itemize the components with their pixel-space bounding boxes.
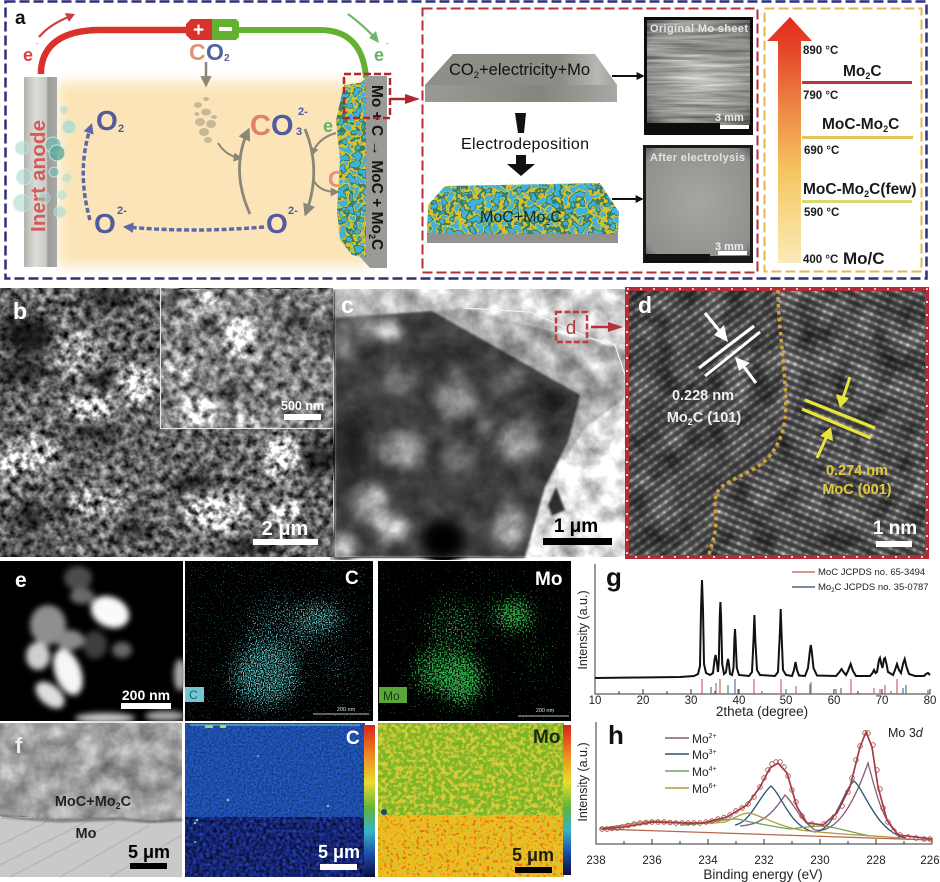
legend g xyxy=(792,567,929,594)
panel: Mo elemental map xyxy=(378,561,571,721)
Mo plate: CO xyxy=(449,61,474,79)
panel d: HRTEM image xyxy=(627,289,927,557)
x tick labels h: 226 xyxy=(920,855,940,867)
phase labels: 790 °C xyxy=(803,90,838,102)
scale bar 1 um: 1 μm xyxy=(554,516,598,537)
phase labels: Mo/C xyxy=(843,249,885,268)
carbon flakes xyxy=(194,97,217,143)
phase labels: 2 xyxy=(865,71,870,81)
Mo2C annotation xyxy=(667,388,741,427)
Mo title: Mo xyxy=(535,569,562,590)
phase labels xyxy=(802,45,916,268)
CO3 2- label: O xyxy=(271,110,294,142)
C title: C xyxy=(345,568,359,589)
bold down arrow xyxy=(507,155,535,176)
region d marker and arrow: d xyxy=(566,318,576,339)
Mo plate: 2 xyxy=(474,70,479,81)
Mo plate: +electricity+Mo xyxy=(479,61,590,79)
scale bar 5 um: 5 μm xyxy=(128,842,170,862)
colour scale Mo xyxy=(563,725,571,875)
region d marker and arrow xyxy=(556,312,623,342)
photo: after electrolysis: 3 mm xyxy=(715,241,744,253)
scale bar 1 um xyxy=(543,516,612,545)
Mo scale bar xyxy=(518,708,569,716)
electron flow arrows: e xyxy=(374,45,384,65)
phase labels: 690 °C xyxy=(804,145,839,157)
phase labels: 890 °C xyxy=(803,45,838,57)
x tick labels g: 80 xyxy=(924,695,936,707)
deposited plate: C xyxy=(550,209,562,226)
O2 label: O xyxy=(96,105,118,136)
phase labels: C(few) xyxy=(869,181,916,198)
C legend chip: C xyxy=(189,688,198,702)
Mo2C annotation: Mo xyxy=(667,410,688,426)
coating label: MoC+Mo xyxy=(55,794,116,810)
panel: C intensity map xyxy=(185,723,375,877)
CO3 2- label: 3 xyxy=(296,126,302,138)
phase labels: C xyxy=(870,63,882,80)
panel: C elemental map xyxy=(185,561,373,721)
C title: C xyxy=(346,728,360,749)
Mo label: Mo xyxy=(76,826,97,842)
scale bar 1 nm: 1 nm xyxy=(873,518,917,539)
Mo 3d label: Mo 3d xyxy=(888,726,924,740)
photo: after electrolysis xyxy=(643,145,753,263)
MoC annotation: MoC (001) xyxy=(822,482,892,498)
photo: original Mo sheet xyxy=(644,17,753,135)
panel c: TEM image xyxy=(330,289,625,560)
envelope fit xyxy=(602,732,932,839)
Mo scale bar: 200 nm xyxy=(536,708,555,714)
Mo plate xyxy=(425,54,617,102)
temperature arrow xyxy=(767,17,812,263)
e- and C at cathode: C xyxy=(328,166,345,192)
colour scale C xyxy=(364,725,375,877)
label g: g xyxy=(606,562,622,592)
oxygen ion dashed cycle xyxy=(83,126,264,230)
legend h: 4+ xyxy=(709,766,717,773)
scale bar 200 nm: 200 nm xyxy=(122,687,170,703)
label d: d xyxy=(638,292,652,318)
x tick labels g: 60 xyxy=(828,695,840,707)
electrodeposition label: Electrodeposition xyxy=(461,136,589,153)
Mo2C annotation: 2 xyxy=(688,417,693,427)
x tick labels h: 236 xyxy=(642,855,662,867)
x tick labels h xyxy=(586,855,940,867)
legend h: Mo xyxy=(692,782,709,796)
electron flow arrows xyxy=(23,13,389,65)
CO3 2- label: C xyxy=(250,110,271,142)
h axes xyxy=(596,722,932,844)
CO2 label with arrow xyxy=(189,39,230,84)
phase labels: 400 °C xyxy=(803,254,838,266)
legend h: Mo xyxy=(692,732,709,746)
down arrow stem xyxy=(515,113,526,133)
legend g: Mo xyxy=(818,582,831,593)
legend h: 6+ xyxy=(709,783,717,790)
XRD trace xyxy=(595,580,930,678)
deposit MoC and Mo2C layer xyxy=(336,82,366,258)
coating label: 2 xyxy=(116,801,121,811)
phase labels: MoC-Mo xyxy=(822,116,883,133)
x tick labels h: 234 xyxy=(698,855,718,867)
gas bubbles xyxy=(13,106,76,218)
x tick labels g: 40 xyxy=(733,695,745,707)
C legend chip xyxy=(185,687,204,702)
electron flow arrows: - xyxy=(36,41,39,48)
panel h: XPS chart xyxy=(576,720,940,882)
inset SEM xyxy=(160,288,334,428)
coating label: C xyxy=(121,794,132,810)
C scale bar: 200 nm xyxy=(337,707,356,713)
inert anode electrode: Inert anode xyxy=(27,120,50,232)
x title h: Binding energy (eV) xyxy=(703,867,823,882)
Mo cathode sheet: Mo + C → MoC + Mo xyxy=(368,85,385,234)
O2- label right xyxy=(266,205,298,239)
lattice fringes Mo2C xyxy=(699,313,760,383)
wires and battery xyxy=(41,19,366,78)
panel label a: a xyxy=(15,8,26,29)
photo: original Mo sheet: Original Mo sheet xyxy=(650,23,748,35)
fit components xyxy=(600,763,932,840)
zoom box and arrow xyxy=(344,74,420,118)
arrow to after photo xyxy=(612,198,642,200)
C scale bar xyxy=(313,707,369,714)
deposited plate: MoC+Mo xyxy=(480,209,545,226)
legend g: 2 xyxy=(831,588,835,594)
phase labels: 2 xyxy=(883,124,888,134)
Mo cathode sheet: C xyxy=(368,239,385,250)
label h: h xyxy=(608,720,624,750)
panel g: XRD chart xyxy=(576,562,936,719)
panel: temperature phase ladder xyxy=(764,8,922,272)
CO2 label with arrow: C xyxy=(189,39,206,65)
electron flow arrows: - xyxy=(386,41,389,48)
CO2 label with arrow: O xyxy=(206,39,224,65)
O2- label right: O xyxy=(266,208,288,239)
x tick labels g: 70 xyxy=(876,695,888,707)
Mo2C annotation: 0.228 nm xyxy=(672,388,734,404)
photo: original Mo sheet: 3 mm xyxy=(715,112,744,124)
wires and battery: + xyxy=(193,20,204,41)
O2- label left: 2- xyxy=(117,205,127,217)
O2- label right: 2- xyxy=(288,205,298,217)
CO3 2- label: 2- xyxy=(298,106,308,118)
phase labels: MoC-Mo xyxy=(803,181,864,198)
x tick labels g: 50 xyxy=(780,695,792,707)
x tick labels g xyxy=(589,695,936,707)
Mo title: Mo xyxy=(533,727,560,748)
Mo2C annotation: C (101) xyxy=(693,410,741,426)
phase labels: 2 xyxy=(864,189,869,199)
panel e: dark field image xyxy=(0,561,186,723)
MoC annotation xyxy=(822,463,892,498)
scale bar 5 um: 5 μm xyxy=(512,845,554,865)
x tick labels h: 232 xyxy=(754,855,774,867)
electron flow arrows: e xyxy=(23,45,33,65)
panel b: SEM image xyxy=(0,288,335,557)
legend g: MoC JCPDS no. 65-3494 xyxy=(818,567,925,578)
inert anode electrode xyxy=(24,77,57,267)
CO3 2- label xyxy=(250,106,308,142)
label b: b xyxy=(13,298,27,324)
x title g: 2theta (degree) xyxy=(716,704,808,719)
deposited plate xyxy=(427,183,619,243)
carbonate cycle arrows xyxy=(218,129,337,214)
legend h: 3+ xyxy=(709,749,717,756)
phase labels: Mo xyxy=(843,63,865,80)
O2- label left xyxy=(94,205,127,239)
molten salt bath xyxy=(58,82,370,266)
legend h: 2+ xyxy=(709,733,717,740)
arrow to original sheet photo xyxy=(612,75,643,77)
reference lines xyxy=(702,679,928,694)
Mo legend chip xyxy=(379,687,407,703)
g axes xyxy=(595,564,930,694)
scale bar 2 um xyxy=(253,518,318,545)
scale bar 5 um: 5 μm xyxy=(318,842,360,862)
data circles xyxy=(600,731,932,841)
x tick labels h: 230 xyxy=(810,855,830,867)
O2 label: 2 xyxy=(118,123,124,135)
legend h: Mo xyxy=(692,748,709,762)
MoC annotation: 0.274 nm xyxy=(826,463,888,479)
e- and C at cathode: e xyxy=(323,116,333,136)
x tick labels g: 20 xyxy=(637,695,649,707)
Mo cathode sheet: 2 xyxy=(367,234,377,239)
scale bar 2 um: 2 μm xyxy=(262,518,308,540)
CO2 label with arrow: 2 xyxy=(224,53,230,64)
panel a: electrolysis schematic xyxy=(6,2,926,278)
x tick labels h: 228 xyxy=(866,855,886,867)
inset SEM: 500 nm xyxy=(281,399,324,413)
y label g: Intensity (a.u.) xyxy=(576,590,590,670)
legend g: C JCPDS no. 35-0787 xyxy=(835,582,929,593)
lattice fringes MoC xyxy=(802,377,875,458)
photo: after electrolysis: After electrolysis xyxy=(650,152,745,164)
legend h xyxy=(665,732,717,796)
x tick labels g: 10 xyxy=(589,695,601,707)
phase boundary dotted line xyxy=(709,290,786,555)
label c: c xyxy=(341,292,354,318)
y label h: Intensity (a.u.) xyxy=(576,742,590,822)
label e: e xyxy=(15,569,27,592)
Mo legend chip: Mo xyxy=(383,689,400,703)
x tick labels g: 30 xyxy=(685,695,697,707)
panel: electrodeposition process xyxy=(422,8,758,272)
e- and C at cathode xyxy=(323,116,345,192)
O2- label left: O xyxy=(94,208,116,239)
phase labels: 590 °C xyxy=(804,207,839,219)
legend h: Mo xyxy=(692,765,709,779)
x tick labels h: 238 xyxy=(586,855,606,867)
panel f: cross-section SEM xyxy=(0,723,182,877)
Mo cathode sheet xyxy=(352,76,387,268)
phase labels: C xyxy=(888,116,899,133)
deposited plate: 2 xyxy=(545,217,550,227)
panel: Mo intensity map xyxy=(378,723,571,877)
label f: f xyxy=(15,733,23,758)
